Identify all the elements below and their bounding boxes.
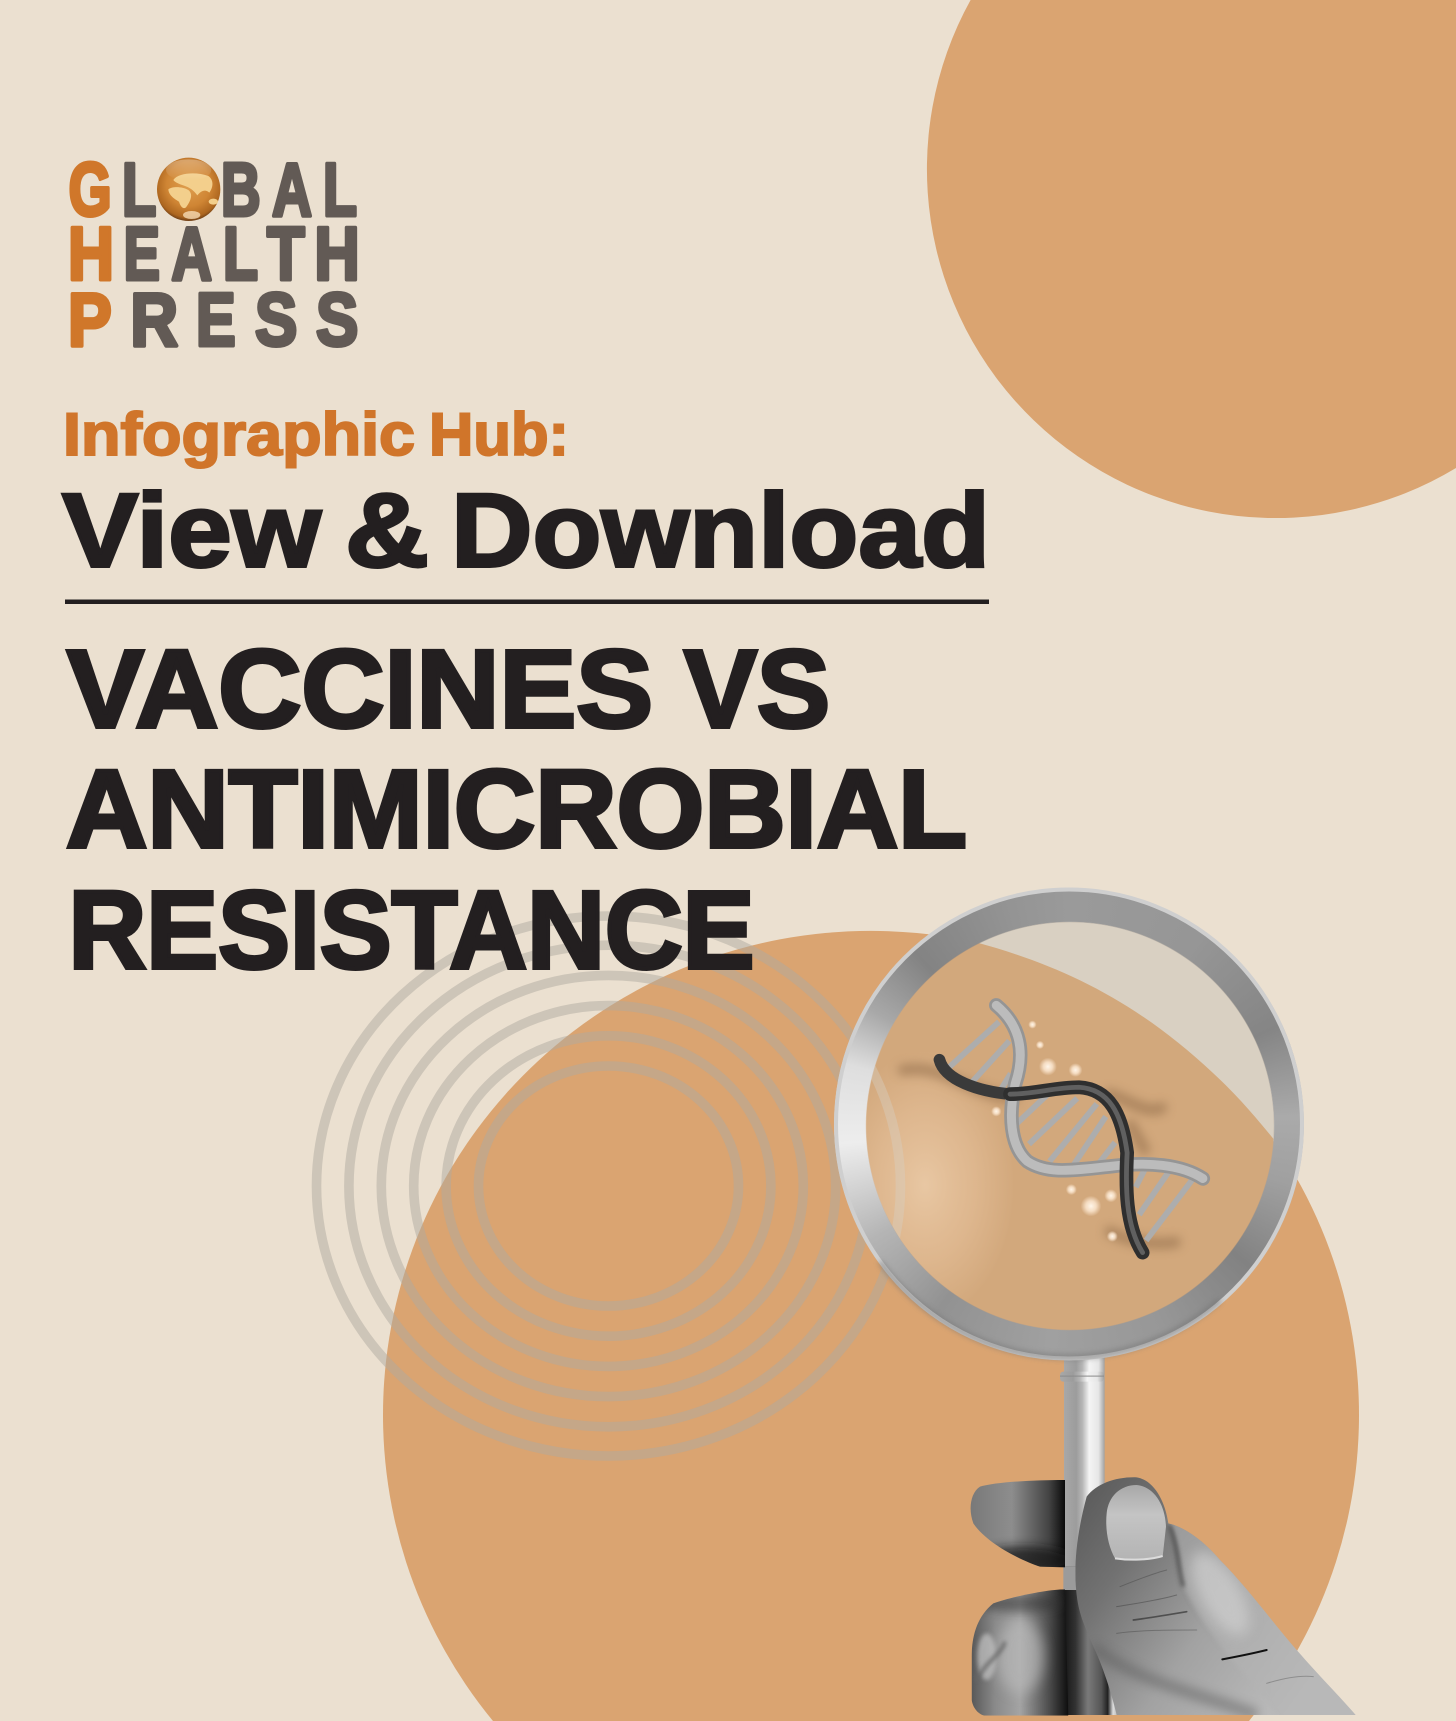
logo: Global Health Press: B xyxy=(221,147,261,231)
logo: Global Health Press: L xyxy=(323,147,357,231)
magnifier handle xyxy=(1060,1357,1117,1715)
logo: Global Health Press: H xyxy=(314,212,360,296)
logo: Global Health Press: E xyxy=(124,212,160,296)
logo: Global Health Press: A xyxy=(272,147,312,231)
subheading: Infographic Hub: Infographic xyxy=(63,401,415,468)
dna dark strand lower layer xyxy=(939,1060,1010,1094)
logo: Global Health Press: P xyxy=(68,277,112,361)
title: Vaccines vs Antimicrobial Resistance: VACCINES xyxy=(67,628,653,751)
dna light strand xyxy=(996,1005,1203,1179)
hand holding magnifier xyxy=(967,1473,1360,1720)
heading: View and Download: View xyxy=(62,472,321,590)
logo: Global Health Press: T xyxy=(267,212,305,296)
logo: Global Health Press: A xyxy=(171,212,212,296)
title: Vaccines vs Antimicrobial Resistance: RESISTANCE xyxy=(68,869,754,992)
logo: Global Health Press: L xyxy=(223,212,258,296)
dna shadows xyxy=(903,1069,1175,1244)
divider rule xyxy=(65,600,989,604)
title: Vaccines vs Antimicrobial Resistance xyxy=(66,628,967,992)
logo: Global Health Press: S xyxy=(255,277,297,361)
heading: View and Download: & xyxy=(345,472,429,590)
dna dark strand upper layer xyxy=(1010,1087,1143,1253)
logo: Global Health Press: H xyxy=(68,212,114,296)
concentric rings xyxy=(316,916,900,1456)
skin creases xyxy=(1117,1570,1313,1683)
magnifying glass lens xyxy=(866,922,1274,1330)
subheading: Infographic Hub xyxy=(63,401,569,468)
lower finger xyxy=(970,1587,1070,1717)
icon: globe xyxy=(157,158,220,221)
logo: Global Health Press: R xyxy=(130,277,178,361)
upper finger xyxy=(970,1480,1065,1568)
heading: View and Download xyxy=(62,472,990,590)
subheading: Infographic Hub: Hub: xyxy=(429,401,569,468)
title: Vaccines vs Antimicrobial Resistance: VS xyxy=(684,628,830,751)
sparkles xyxy=(991,1020,1118,1242)
DNA helix xyxy=(903,1005,1203,1253)
logo: Global Health Press: E xyxy=(196,277,236,361)
decorative circle: bottom xyxy=(383,931,1359,1721)
logo: Global Health Press: G xyxy=(69,147,112,231)
thumb and palm xyxy=(1070,1473,1360,1720)
logo: Global Health Press: S xyxy=(316,277,358,361)
magnifying glass metal ring xyxy=(834,888,1304,1360)
dna rungs xyxy=(950,1022,1193,1241)
thumbnail xyxy=(1106,1485,1166,1559)
title: Vaccines vs Antimicrobial Resistance: ANTIMICROBIAL xyxy=(66,748,967,871)
logo: Global Health Press: L xyxy=(122,147,156,231)
decorative circle: top right xyxy=(927,0,1456,518)
heading: View and Download: Download xyxy=(451,472,990,590)
logo: Global Health Press xyxy=(68,147,360,361)
